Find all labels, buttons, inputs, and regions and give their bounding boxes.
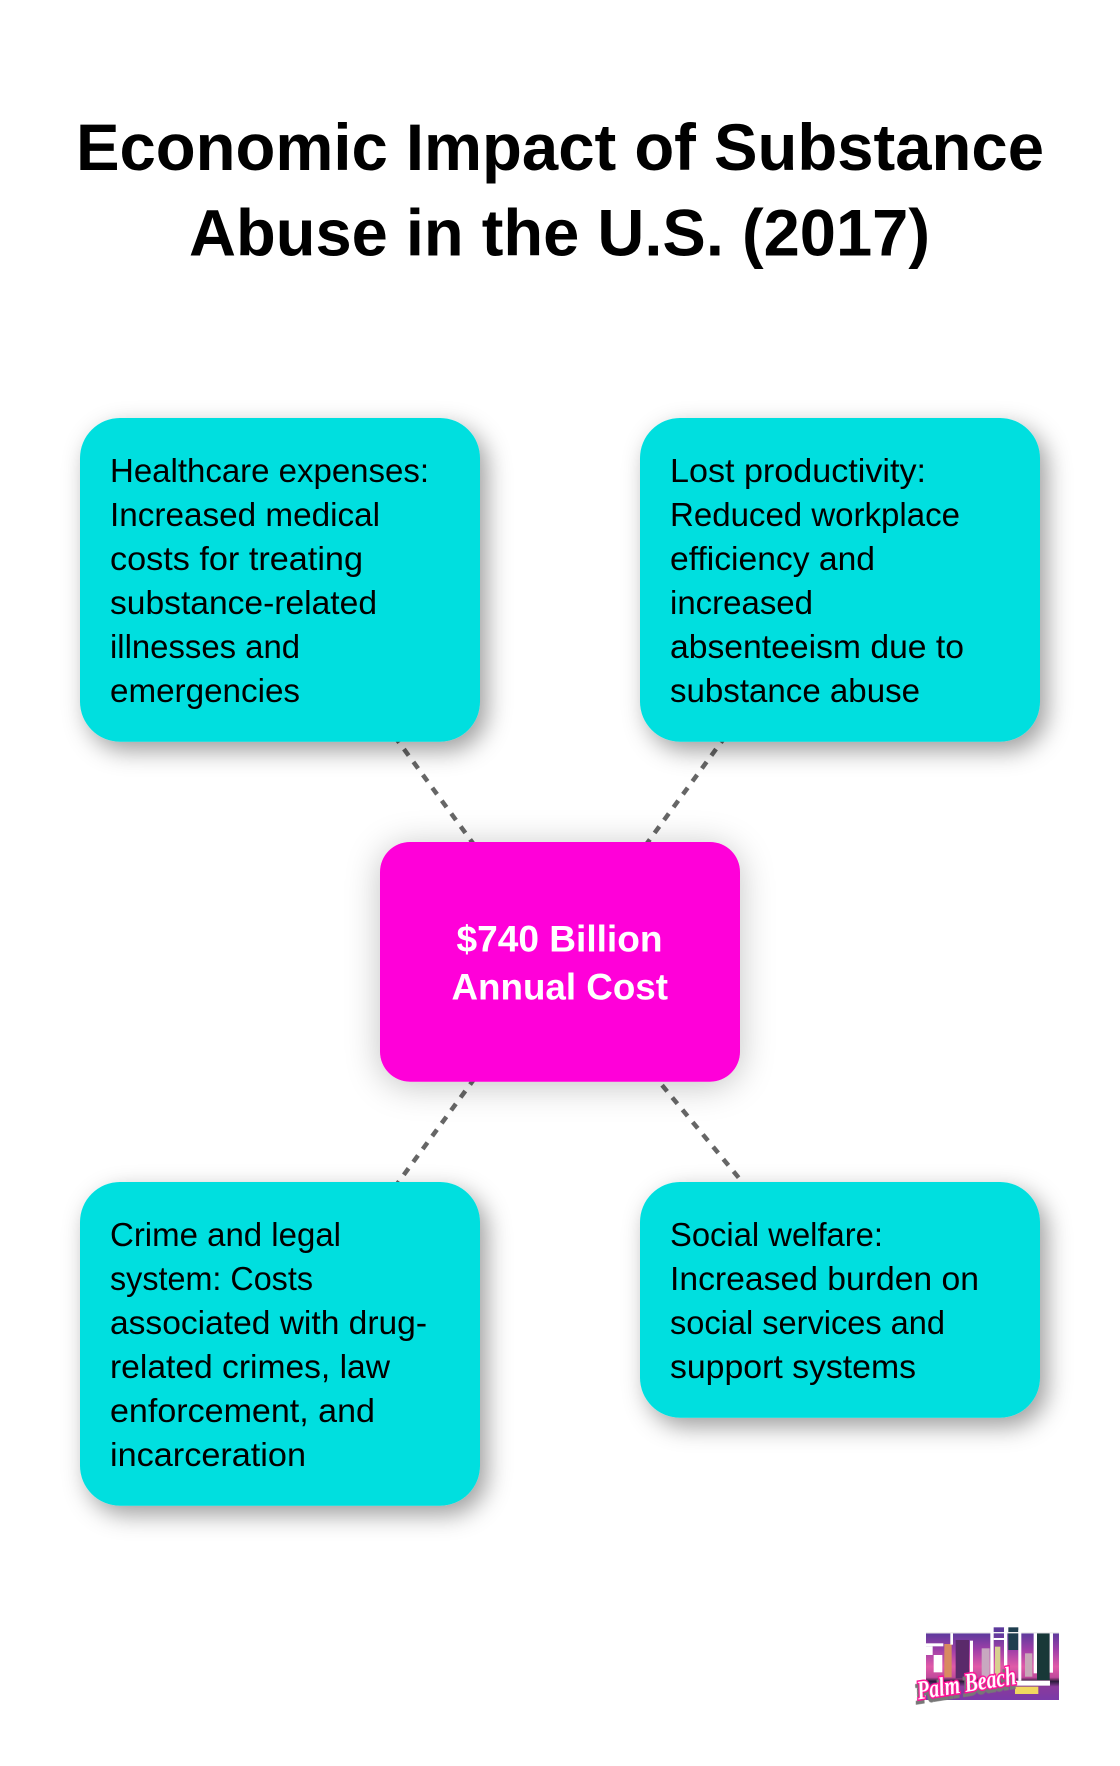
panel: social welfare: Increased burden on — [670, 1260, 979, 1297]
logo: Amity Palm Beach: Palm Beach — [914, 1660, 1018, 1705]
title: Abuse in the U.S. (2017) — [189, 196, 930, 270]
panel: healthcare expenses: Increased medical — [110, 496, 380, 533]
panel: central cost — [380, 842, 740, 1082]
panel: lost productivity: Reduced workplace — [670, 496, 960, 533]
dashed connector: social welfare — [560, 962, 840, 1300]
panel: crime and legal system: enforcement, and — [110, 1392, 375, 1429]
dashed connector: crime — [280, 962, 560, 1344]
dashed connector: healthcare — [280, 580, 560, 962]
panel: social welfare: support systems — [670, 1348, 916, 1385]
panel: crime and legal system: incarceration — [110, 1436, 306, 1473]
dashed connector: productivity — [560, 580, 840, 962]
panel: crime and legal system: system: Costs — [110, 1260, 313, 1297]
panel: social welfare — [640, 1182, 1040, 1418]
panel: crime and legal system: Crime and legal — [110, 1216, 341, 1253]
panel: lost productivity: efficiency and — [670, 540, 875, 577]
panel: healthcare expenses: illnesses and — [110, 628, 300, 665]
panel: lost productivity: increased — [670, 584, 813, 621]
panel: crime and legal system — [80, 1182, 480, 1506]
panel: lost productivity: absenteeism due to — [670, 628, 964, 665]
panel: healthcare expenses — [80, 418, 480, 742]
panel: lost productivity: Lost productivity: — [670, 452, 926, 489]
panel: social welfare: social services and — [670, 1304, 945, 1341]
panel: healthcare expenses: emergencies — [110, 672, 300, 709]
panel: crime and legal system: related crimes, law — [110, 1348, 390, 1385]
logo: Amity Palm Beach — [914, 1627, 1059, 1705]
panel: crime and legal system: associated with drug- — [110, 1304, 427, 1341]
panel: lost productivity: substance abuse — [670, 672, 920, 709]
title: Economic Impact of Substance — [76, 110, 1044, 184]
panel: lost productivity — [640, 418, 1040, 742]
panel: healthcare expenses: Healthcare expenses: — [110, 452, 429, 489]
title — [76, 110, 1044, 270]
panel: healthcare expenses: substance-related — [110, 584, 377, 621]
panel: central cost: $740 Billion — [456, 919, 662, 960]
panel: healthcare expenses: costs for treating — [110, 540, 363, 577]
panel: central cost: Annual Cost — [452, 966, 668, 1007]
panel: social welfare: Social welfare: — [670, 1216, 883, 1253]
